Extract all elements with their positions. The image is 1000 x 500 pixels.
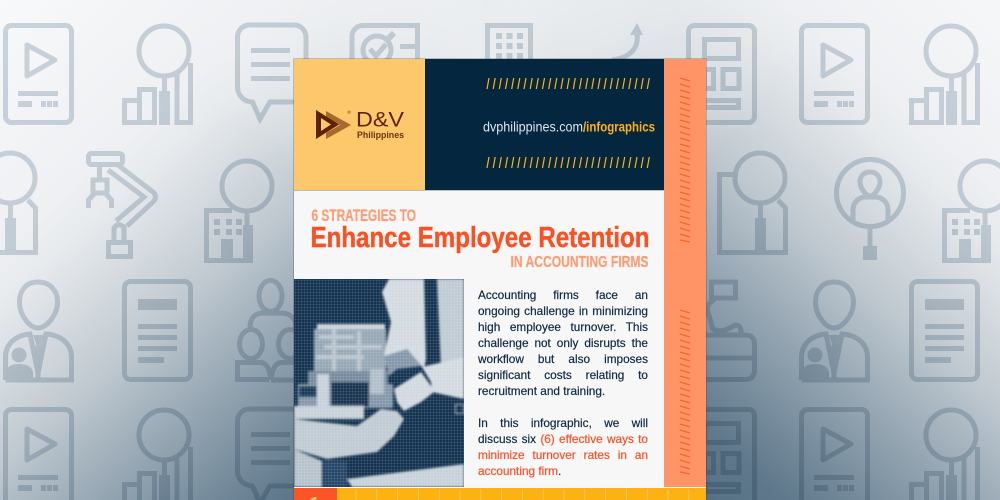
- logo panel: [294, 59, 425, 190]
- logo wordmark: [348, 108, 404, 141]
- icon: document magnifier left: [0, 153, 36, 255]
- icon: chart magnifier bottom left: [124, 410, 190, 500]
- website url: [483, 120, 655, 134]
- icon: desk and bust: [700, 282, 754, 380]
- intro text: ongoing challenge in minimizing: [478, 304, 648, 318]
- intro text: challenge not only disrupts the: [478, 336, 648, 350]
- icon: building magnifier left: [206, 161, 272, 263]
- logo wordmark: Philippines: [357, 130, 404, 141]
- infographic document: [294, 59, 706, 500]
- icon: document right: [912, 282, 978, 380]
- icon: office building: [488, 26, 530, 86]
- icon: businessman: [6, 282, 72, 381]
- side strip panel: [664, 59, 706, 487]
- title block: [294, 190, 664, 271]
- footer band: [337, 488, 706, 500]
- icon: video tablet: [6, 26, 72, 122]
- icon: video tablet right: [802, 26, 868, 122]
- intro text: significant costs relating to: [478, 368, 648, 382]
- icon: video tablet bottom left: [6, 410, 72, 500]
- intro text: discuss six (6) effective ways to: [478, 432, 648, 446]
- icon: businessman right: [802, 282, 868, 381]
- icon: video tablet bottom right: [802, 410, 868, 500]
- icon: chat bubble: [238, 25, 306, 119]
- icon: document: [124, 282, 190, 380]
- intro text: In this infographic, we will: [478, 416, 648, 430]
- icon: chart magnifier right: [912, 26, 978, 125]
- url panel: [425, 59, 664, 190]
- intro text: high employee turnover. This: [478, 320, 648, 334]
- icon: document magnifier right: [720, 153, 786, 255]
- logo wordmark: D&V: [356, 108, 404, 132]
- icon: newspaper bottom: [688, 410, 754, 500]
- intro text: Accounting firms face an: [478, 288, 648, 302]
- intro text: [478, 288, 648, 478]
- logo wordmark: ®: [348, 109, 352, 115]
- intro text: workflow but also imposes: [478, 352, 648, 366]
- icon: person magnifier: [836, 160, 904, 260]
- intro text: accounting firm.: [478, 464, 561, 478]
- icon: people group: [238, 280, 302, 380]
- icon: checklist: [352, 25, 420, 70]
- icon: chart magnifier: [124, 26, 190, 125]
- intro text: minimize turnover rates in an: [478, 448, 648, 462]
- icon: chat bubble bottom: [238, 409, 306, 500]
- icon: building magnifier right: [944, 161, 1000, 263]
- halftone handshake photo: [294, 279, 464, 487]
- icon: growth arrow: [612, 23, 643, 60]
- icon: chart magnifier bottom right: [912, 410, 978, 500]
- intro text: recruitment and training.: [478, 384, 605, 398]
- icon: robot arm: [88, 154, 156, 256]
- website url: dvphilippines.com: [483, 120, 583, 134]
- logo mark: [316, 110, 351, 139]
- icon: newspaper: [688, 26, 754, 122]
- footer number tab: [294, 488, 337, 500]
- title line: 6 strategies to: 6 STRATEGIES TO: [312, 207, 416, 225]
